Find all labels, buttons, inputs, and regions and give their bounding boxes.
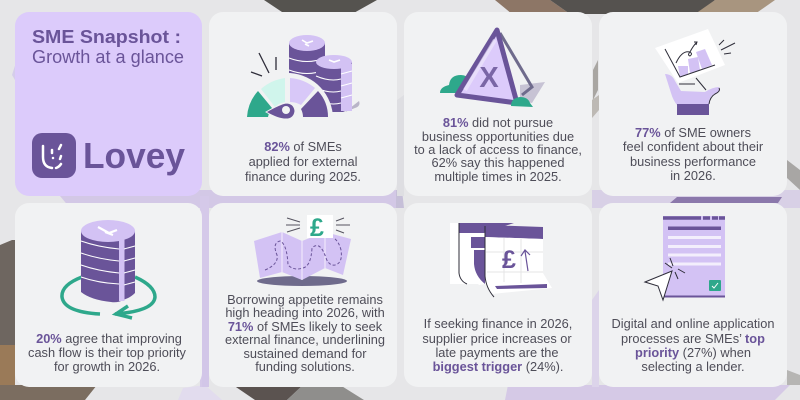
panel: 71% borrowing appetite: 71% of SMEs likely to seek [228, 319, 383, 334]
heading: SME Snapshot : [32, 27, 181, 47]
panel: 71% borrowing appetite [209, 203, 397, 387]
panel: 77% confident: business performance [630, 154, 756, 169]
panel: 81% lack of access: to a lack of access to finance, [414, 142, 582, 157]
heading [32, 27, 184, 67]
icon: map with pound sign: £ [310, 214, 324, 242]
panel: 71% borrowing appetite: external finance, underlining [225, 332, 385, 347]
logo: Lovey [32, 133, 185, 178]
text: 20% agree that improving [36, 331, 182, 346]
icon: calendar pages: £ [502, 246, 516, 274]
panel: 71% borrowing appetite: sustained demand for [243, 346, 367, 361]
panel: title and logo [15, 12, 202, 196]
icon: gauge with coins [244, 35, 360, 119]
panel: 20% cash flow: for growth in 2026. [54, 359, 160, 374]
text: If seeking finance in 2026, [424, 316, 572, 331]
text: 77% of SME owners [635, 125, 751, 140]
text: 81% did not pursue [443, 115, 553, 130]
panel: 27% digital application: priority (27%) when [635, 345, 751, 360]
icon: hand holding chart [655, 29, 735, 115]
panel: 27% digital application: selecting a lender. [641, 359, 745, 374]
panel: 81% lack of access: business opportunities due [422, 129, 574, 144]
icon: calendar pages [450, 223, 552, 297]
heading: Growth at a glance [32, 47, 184, 67]
panel: 24% biggest trigger: supplier price increases or [422, 331, 572, 346]
panel: 24% biggest trigger: biggest trigger (24%). [433, 359, 563, 374]
panel: 24% biggest trigger [404, 203, 592, 387]
panel: 20% cash flow [15, 203, 202, 387]
icon: map with pound sign [254, 214, 351, 286]
icon: coin stack with arrow [62, 220, 155, 318]
panel: 27% digital application: processes are SMEs’ top [621, 331, 765, 346]
panel: 81% lack of access [404, 12, 592, 196]
logo: Lovey: Lovey [83, 135, 185, 176]
icon: application form with cursor [645, 216, 725, 300]
icon: warning triangle [440, 30, 545, 107]
text: Digital and online application [612, 316, 774, 331]
panel: 81% lack of access: multiple times in 2025. [434, 169, 562, 184]
panel: 82% applied for finance [209, 12, 397, 196]
panel: 81% lack of access: 62% say this happened [431, 155, 565, 170]
panel: 71% borrowing appetite: funding solutions. [255, 359, 355, 374]
panel: 77% confident: in 2026. [670, 168, 716, 183]
panel: 27% digital application [599, 203, 787, 387]
panel: 77% confident: feel confident about their [623, 139, 764, 154]
text: 82% of SMEs [264, 139, 342, 154]
panel: 77% confident [599, 12, 787, 196]
panel: 24% biggest trigger: late payments are the [435, 345, 559, 360]
icon: warning triangle: X [479, 62, 499, 94]
panel: 71% borrowing appetite: high heading into 2026, with [225, 305, 385, 320]
text: Borrowing appetite remains [227, 292, 383, 307]
panel: 82% applied for finance: finance during 2025. [245, 169, 361, 184]
panel: 82% applied for finance: applied for external [249, 154, 357, 169]
panel: 20% cash flow: cash flow is their top priority [28, 345, 187, 360]
